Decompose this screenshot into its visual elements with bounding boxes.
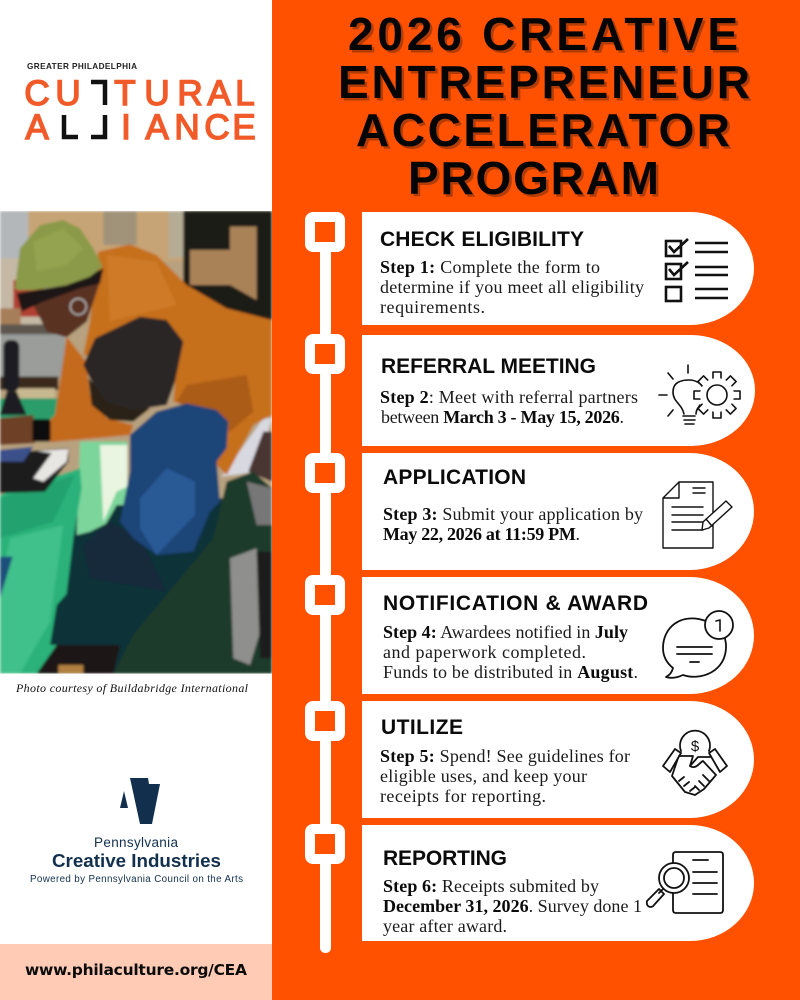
text: step 5: Step 5: Spend! See guidelines for	[380, 746, 630, 766]
text: step 6: year after award.	[383, 916, 507, 936]
icon: handshake with coin	[663, 731, 727, 795]
text: step 2: Step 2: Meet with referral partners	[380, 387, 638, 407]
logo: Greater Philadelphia Cultural Alliance: A	[145, 108, 169, 147]
logo: Greater Philadelphia Cultural Alliance: E	[232, 108, 256, 147]
logo: Pennsylvania Creative Industries	[30, 778, 243, 885]
panel: step 2 referral meeting	[362, 335, 755, 446]
background: orange main panel	[272, 0, 800, 1000]
logo: Greater Philadelphia Cultural Alliance: C	[24, 74, 50, 113]
title: ENTREPRENEUR	[338, 56, 750, 108]
title: ACCELERATOR	[356, 104, 730, 156]
text: step 1	[380, 257, 644, 317]
text: step 4: and paperwork completed.	[383, 642, 586, 662]
text: step 1: requirements.	[380, 297, 485, 317]
website bar	[0, 944, 272, 1000]
text: step 1: determine if you meet all eligibility	[380, 277, 644, 297]
text: step 1: Step 1: Complete the form to	[380, 257, 600, 277]
timeline	[310, 217, 340, 953]
text: step 6: Step 6: Receipts submited by	[383, 876, 599, 896]
panel: step 1 check eligibility	[362, 212, 754, 325]
icon: magnifier over document	[647, 852, 723, 913]
logo: Greater Philadelphia Cultural Alliance: L	[235, 74, 255, 113]
logo: Greater Philadelphia Cultural Alliance: A	[207, 74, 231, 113]
logo: Greater Philadelphia Cultural Alliance: T	[114, 74, 136, 113]
text: step 4	[383, 622, 638, 682]
text: step 5	[380, 746, 630, 806]
text: step 3: Step 3: Submit your application by	[383, 504, 643, 524]
title: ACCELERATOR	[358, 106, 732, 158]
heading: application: APPLICATION	[383, 466, 526, 489]
text: step 5: eligible uses, and keep your	[380, 766, 587, 786]
title	[338, 8, 752, 206]
website bar: www.philaculture.org/CEA	[25, 961, 247, 979]
text: step 4: Funds to be distributed in August.	[383, 662, 638, 682]
logo: Greater Philadelphia Cultural Alliance: C	[204, 108, 230, 147]
title: PROGRAM	[408, 152, 659, 204]
text: step 2: between March 3 - May 15, 2026.	[381, 407, 624, 427]
heading: check eligibility: CHECK ELIGIBILITY	[380, 228, 584, 251]
title: 2026 CREATIVE	[350, 10, 740, 62]
text: step 4: Step 4: Awardees notified in July	[383, 622, 628, 642]
photo: two people at a music table	[0, 211, 272, 674]
text: step 5: receipts for reporting.	[380, 786, 546, 806]
title: PROGRAM	[410, 154, 662, 206]
logo: Greater Philadelphia Cultural Alliance: A	[25, 108, 49, 147]
icon: handshake with coin: $	[691, 738, 700, 755]
text: step 3	[383, 504, 643, 544]
text: step 6	[383, 876, 642, 936]
photo caption: Photo courtesy of Buildabridge International	[15, 681, 249, 695]
logo: Greater Philadelphia Cultural Alliance: GREATER PHILADELPHIA	[27, 62, 137, 71]
logo: Greater Philadelphia Cultural Alliance: N	[174, 108, 200, 147]
heading: notification and award: NOTIFICATION & AWARD	[383, 592, 648, 615]
heading: reporting: REPORTING	[383, 847, 507, 870]
logo: Greater Philadelphia Cultural Alliance: U	[144, 74, 170, 113]
text: step 3: May 22, 2026 at 11:59 PM.	[383, 524, 580, 544]
logo: Pennsylvania Creative Industries: Pennsylvania	[94, 835, 178, 850]
background: white sidebar	[0, 0, 272, 1000]
logo: Greater Philadelphia Cultural Alliance: U	[55, 74, 81, 113]
panel: step 3 application	[362, 453, 754, 570]
panel: step 4 notification and award	[362, 577, 754, 694]
title: ENTREPRENEUR	[340, 58, 752, 110]
heading: referral meeting: REFERRAL MEETING	[381, 355, 596, 378]
logo: Greater Philadelphia Cultural Alliance: R	[177, 74, 203, 113]
text: step 6: December 31, 2026. Survey done 1	[383, 896, 642, 916]
panel: step 5 utilize	[362, 701, 754, 818]
panel: step 6 reporting	[362, 825, 754, 941]
title: 2026 CREATIVE	[348, 8, 738, 60]
heading: utilize: UTILIZE	[381, 716, 463, 739]
icon: document and pencil	[663, 482, 732, 548]
logo: Pennsylvania Creative Industries: Powered by Pennsylvania Council on the Arts	[30, 874, 243, 885]
logo: Greater Philadelphia Cultural Alliance	[24, 62, 256, 147]
text: step 2	[380, 387, 638, 427]
logo: Greater Philadelphia Cultural Alliance: I	[121, 108, 131, 147]
icon: lightbulb and gear	[659, 365, 740, 424]
logo: Pennsylvania Creative Industries: Creative Industries	[52, 850, 221, 871]
icon: checklist	[666, 239, 728, 301]
icon: chat bubble with badge	[663, 611, 733, 678]
